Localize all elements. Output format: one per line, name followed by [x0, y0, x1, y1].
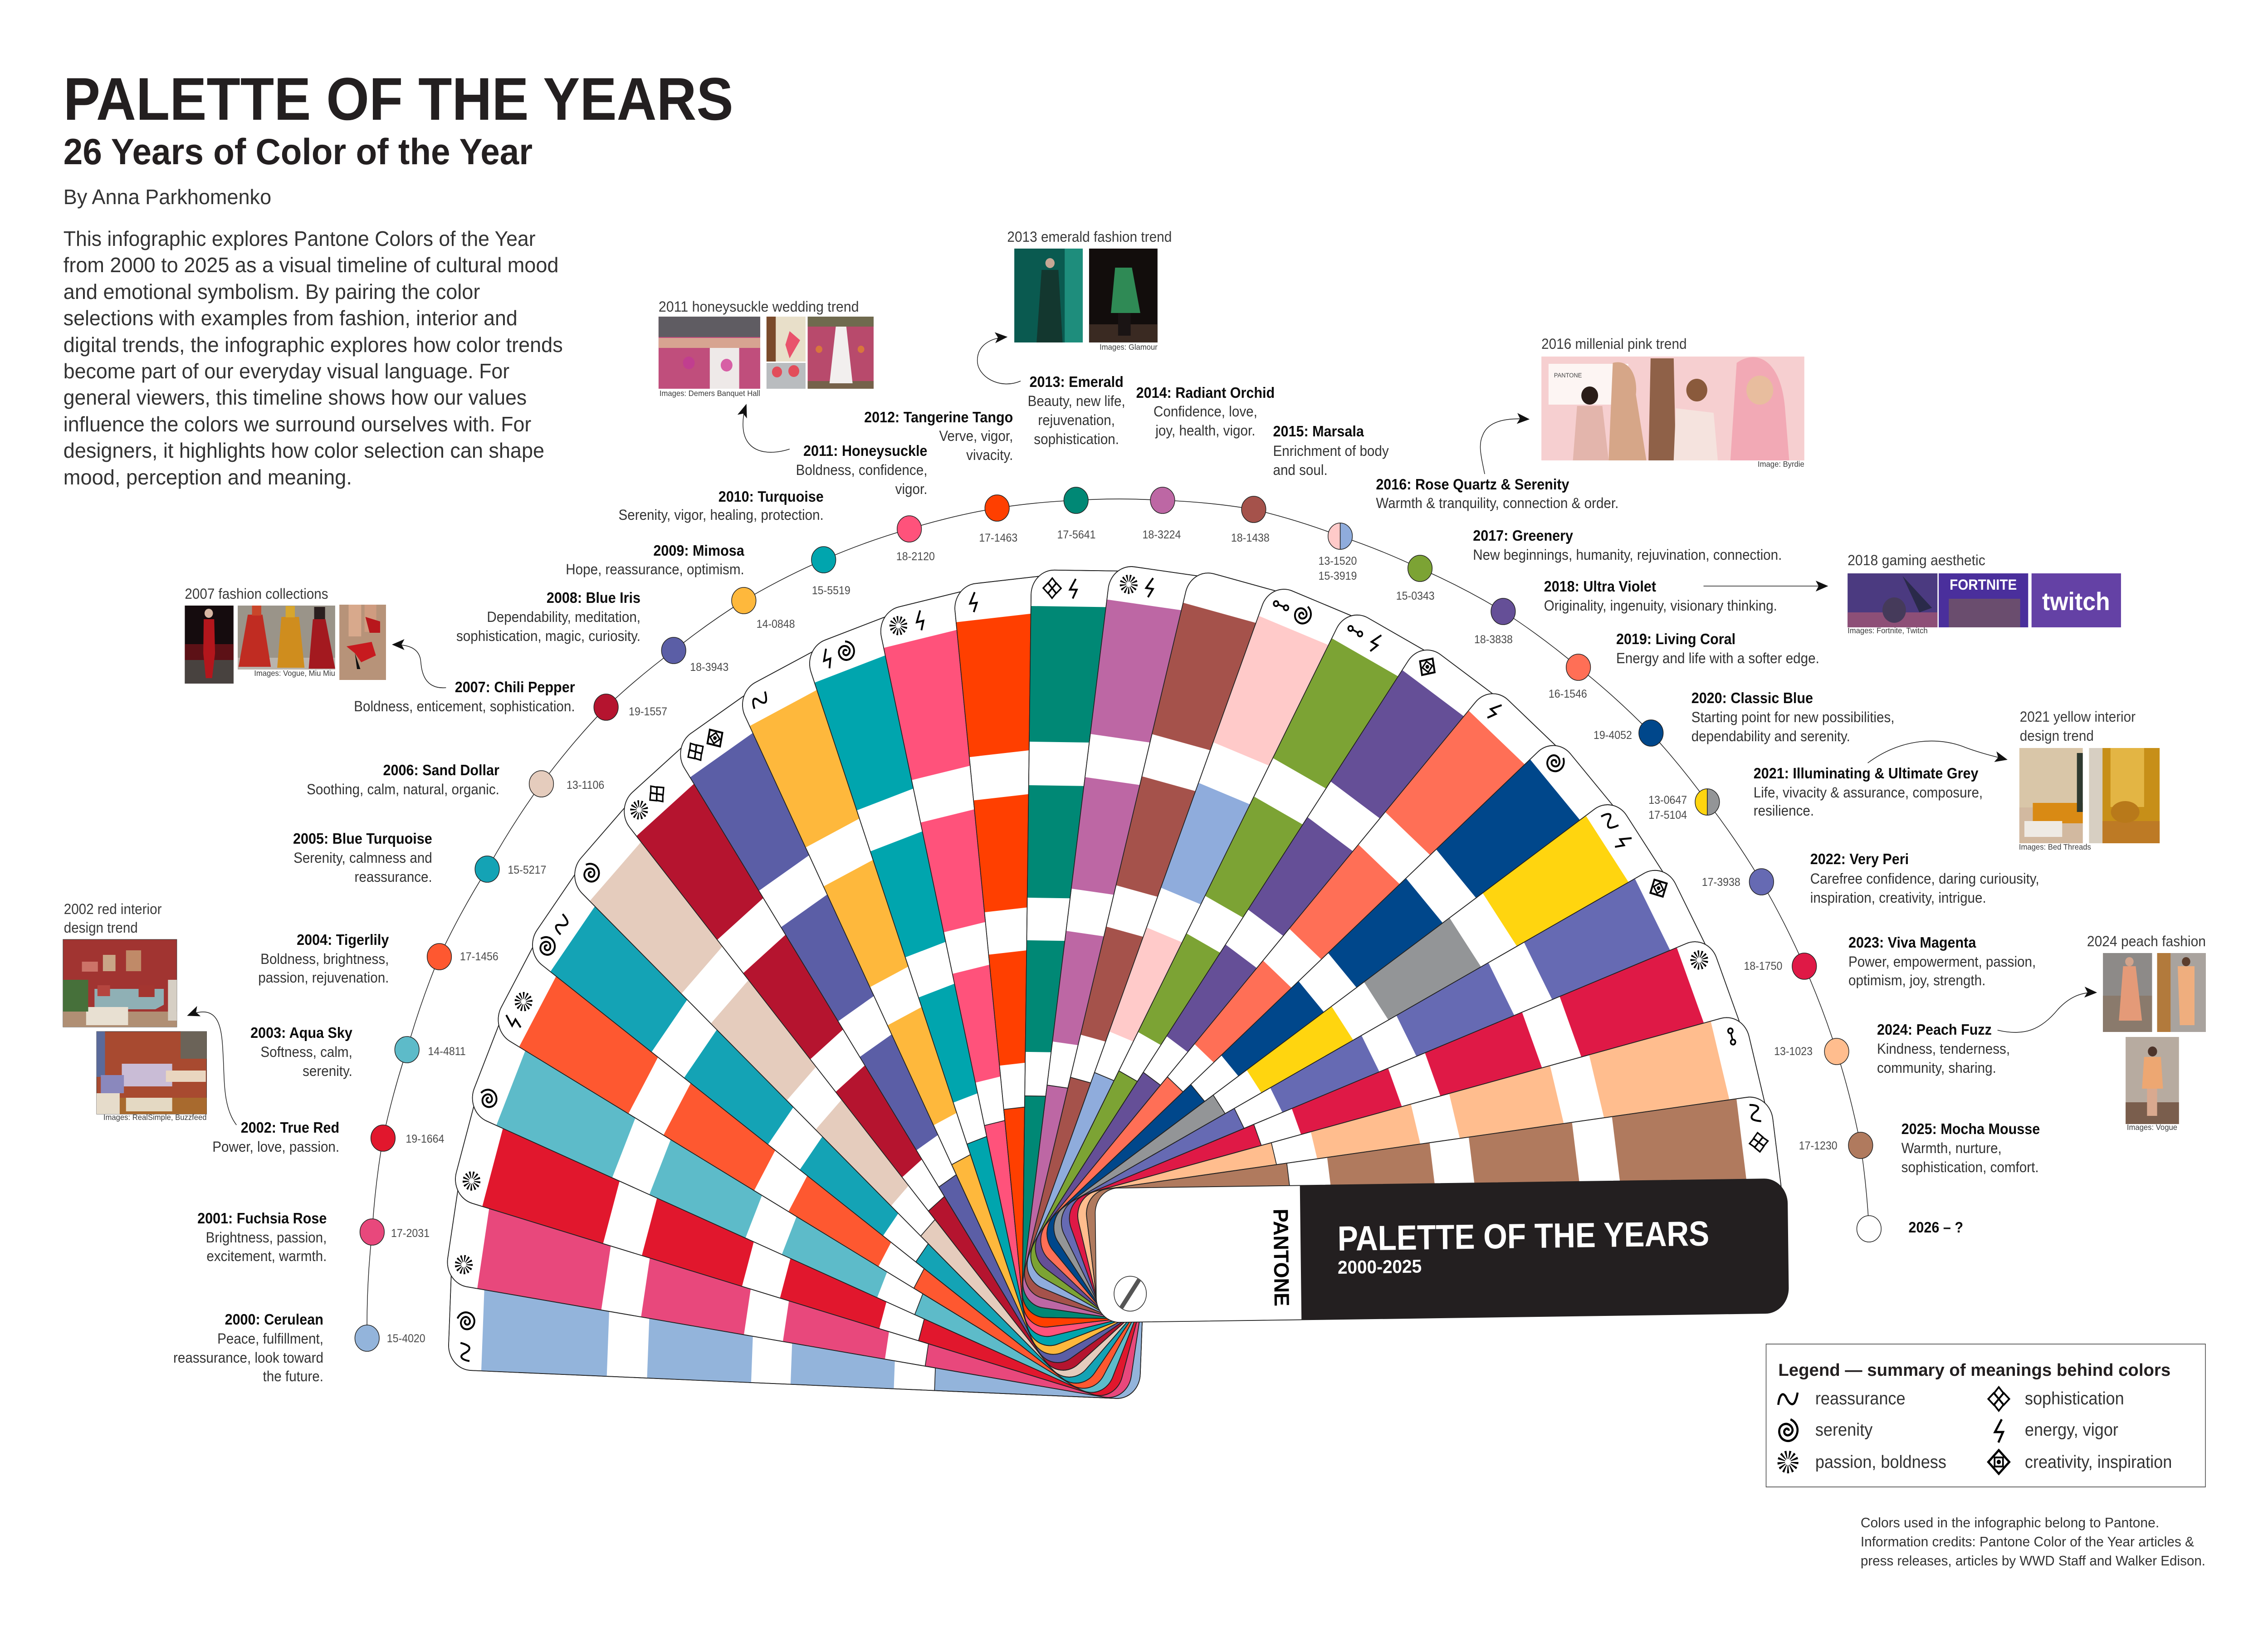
label: 2001 Fuchsia Rose: excitement, warmth.	[206, 1248, 327, 1264]
pantone codes: 17-2031	[391, 1227, 430, 1240]
pantone codes: 15-3919	[1318, 570, 1357, 582]
label: 2011 Honeysuckle: Boldness, confidence,	[796, 462, 927, 478]
label: 2022 Very Peri: inspiration, creativity, intrigue.	[1810, 890, 1986, 906]
label: 2013 Emerald: Beauty, new life,	[1028, 393, 1125, 409]
arrow: 2013 to fashion	[978, 337, 1021, 384]
pantone codes: 17-5104	[1648, 809, 1687, 821]
label: 2008 Blue Iris: 2008: Blue Iris	[547, 589, 640, 606]
legend item: reassurance: reassurance	[1815, 1389, 1906, 1408]
pantone codes: 19-1664	[406, 1133, 444, 1145]
label: 2020 Classic Blue: 2020: Classic Blue	[1691, 689, 1813, 706]
intro paragraph: designers, it highlights how color selection can shape	[64, 440, 544, 462]
photo: bride and bridesmaids	[808, 317, 874, 389]
photo: space scene	[1848, 573, 1937, 627]
label: 2024 Peach Fuzz: community, sharing.	[1877, 1060, 1996, 1076]
label: 2000 Cerulean: Peace, fulfillment,	[217, 1330, 323, 1347]
label: 2004 Tigerlily: 2004: Tigerlily	[297, 931, 389, 948]
pantone codes: 15-4020	[387, 1332, 425, 1345]
cover brand: PANTONE	[1269, 1208, 1293, 1306]
blade: 2003 Aqua Sky	[465, 988, 1152, 1400]
pivot screw	[1114, 1276, 1146, 1311]
intro paragraph: become part of our everyday visual language. For	[64, 360, 509, 383]
label: 2001 Fuchsia Rose: 2001: Fuchsia Rose	[197, 1210, 327, 1227]
label: 2022 Very Peri: Carefree confidence, daring curiousity,	[1810, 870, 2039, 887]
photo: pink collage: PANTONE	[1554, 372, 1582, 379]
label: 2014 Radiant Orchid: joy, health, vigor.	[1155, 422, 1255, 439]
label: 2022 Very Peri: 2022: Very Peri	[1810, 851, 1909, 867]
caption: design trend	[64, 919, 138, 936]
label: 2012 Tangerine Tango: vivacity.	[966, 447, 1013, 463]
photo: calla lily	[767, 317, 806, 362]
pantone codes: 13-1520	[1318, 555, 1357, 567]
intro paragraph: selections with examples from fashion, interior and	[64, 307, 518, 330]
arrow: 2002 to interiors	[189, 1012, 236, 1125]
caption: design trend	[2020, 728, 2094, 744]
caption: 2024 peach fashion	[2087, 933, 2206, 949]
photo: red gown	[185, 606, 234, 684]
blade: 2013 Emerald	[1022, 570, 1156, 1319]
label: 2017 Greenery: New beginnings, humanity, rejuvination, connection.	[1473, 547, 1782, 563]
label: 2002 True Red: 2002: True Red	[241, 1119, 339, 1136]
credit: Images: Fortnite, Twitch	[1848, 626, 1928, 635]
label: 2023 Viva Magenta: 2023: Viva Magenta	[1848, 934, 1976, 951]
legend panel	[1766, 1344, 2205, 1487]
blade: 2002 True Red	[450, 1067, 1150, 1401]
legend heading: Legend — summary of meanings behind colors	[1778, 1360, 2170, 1379]
label: 2019 Living Coral: Energy and life with a softer edge.	[1616, 650, 1819, 666]
intro paragraph: from 2000 to 2025 as a visual timeline of cultural mood	[64, 254, 558, 277]
label: 2006 Sand Dollar: Soothing, calm, natural, organic.	[307, 781, 499, 797]
label: 2005 Blue Turquoise: 2005: Blue Turquoise	[293, 830, 432, 847]
credit: Images: Demers Banquet Hall	[660, 388, 760, 398]
blade: 2000 Cerulean	[448, 1235, 1144, 1399]
label: 2009 Mimosa: 2009: Mimosa	[653, 542, 744, 559]
caption: 2011 honeysuckle wedding trend	[659, 298, 859, 315]
intro paragraph: This infographic explores Pantone Colors of the Year	[64, 228, 536, 250]
cover years: 2000-2025	[1338, 1256, 1422, 1278]
photo: yellow bedroom	[2019, 748, 2083, 843]
photo: red shoes	[339, 605, 386, 680]
blade: 2024 Peach Fuzz	[1073, 1012, 1774, 1328]
caption: 2016 millenial pink trend	[1541, 336, 1687, 352]
arrow: 2024 to peach fashion	[1998, 993, 2095, 1032]
logo: streaming platform	[2032, 573, 2121, 627]
pantone codes: 18-3943	[690, 661, 728, 674]
image group: 2021 yellow interior	[2019, 709, 2160, 851]
blade: 2015 Marsala	[1020, 567, 1312, 1325]
label: 2025 Mocha Mousse: sophistication, comfort.	[1901, 1159, 2039, 1175]
credits note: Colors used in the infographic belong to Pantone.	[1861, 1515, 2159, 1530]
pantone codes: 17-1456	[460, 950, 499, 963]
label: 2020 Classic Blue: dependability and serenity.	[1691, 728, 1850, 744]
credit: Images: Vogue	[2127, 1122, 2177, 1132]
photo: table flowers	[767, 363, 806, 389]
blade: 2014 Radiant Orchid	[1020, 563, 1235, 1322]
blade: 2008 Blue Iris	[672, 674, 1155, 1372]
pantone codes: 16-1546	[1549, 688, 1587, 700]
label: 2011 Honeysuckle: vigor.	[895, 481, 927, 497]
label: 2010 Turquoise: Serenity, vigor, healing, protection.	[618, 507, 824, 523]
photo: peach suit	[2157, 953, 2206, 1032]
pantone codes: 17-1463	[979, 532, 1017, 544]
blade: 2009 Mimosa	[735, 634, 1154, 1363]
blade: 2001 Fuchsia Rose	[444, 1150, 1147, 1401]
label: 2026: 2026 – ?	[1908, 1219, 1963, 1236]
photo: pink collage	[1541, 357, 1804, 460]
label: 2018 Ultra Violet: 2018: Ultra Violet	[1544, 578, 1656, 595]
image group: 2013 emerald fashion	[1007, 229, 1172, 352]
pantone codes: 18-3224	[1143, 528, 1181, 541]
swatch fan	[444, 563, 1789, 1401]
label: 2012 Tangerine Tango: 2012: Tangerine Tango	[864, 409, 1013, 425]
intro paragraph: influence the colors we surround ourselves with. For	[64, 413, 532, 436]
legend item: energy, vigor: energy, vigor	[2025, 1420, 2118, 1439]
photo: bridesmaids	[659, 317, 760, 389]
label: 2021 Illuminating and Ultimate Grey: 2021: Illuminating & Ultimate Grey	[1754, 765, 1979, 782]
credit: Images: Glamour	[1100, 342, 1158, 352]
credit: Images: Vogue, Miu Miu	[254, 668, 335, 678]
photo: game poster: FORTNITE	[1950, 577, 2017, 593]
blade: 2011 Honeysuckle	[876, 583, 1151, 1341]
pantone codes: 18-2120	[896, 550, 935, 563]
label: 2021 Illuminating and Ultimate Grey: Life, vivacity & assurance, composure,	[1754, 784, 1983, 801]
blade: 2010 Turquoise	[803, 603, 1153, 1353]
legend item: creativity, inspiration: creativity, inspiration	[2025, 1452, 2172, 1472]
label: 2020 Classic Blue: Starting point for new possibilities,	[1691, 709, 1895, 725]
label: 2018 Ultra Violet: Originality, ingenuity, visionary thinking.	[1544, 597, 1777, 614]
blade: 2007 Chili Pepper	[615, 722, 1155, 1380]
pantone codes: 17-1230	[1799, 1139, 1838, 1152]
label: 2000 Cerulean: 2000: Cerulean	[225, 1311, 323, 1328]
pantone codes: 14-0848	[757, 618, 795, 631]
cover title: PALETTE OF THE YEARS	[1337, 1214, 1710, 1258]
label: 2015 Marsala: Enrichment of body	[1273, 443, 1389, 459]
photo: orange bedroom	[97, 1032, 207, 1114]
pantone codes: 13-0647	[1648, 794, 1687, 807]
image group: 2007 fashion collections	[185, 586, 386, 684]
blade: 2005 Blue Turquoise	[523, 842, 1154, 1393]
blade: 2020 Classic Blue	[1037, 735, 1637, 1332]
fan cover	[1095, 1178, 1789, 1323]
label: 2006 Sand Dollar: 2006: Sand Dollar	[383, 762, 499, 778]
credit: Images: Bed Threads	[2019, 842, 2091, 851]
pantone codes: 15-5217	[508, 864, 546, 876]
label: 2019 Living Coral: 2019: Living Coral	[1616, 631, 1735, 647]
label: 2003 Aqua Sky: Softness, calm,	[260, 1044, 352, 1060]
blade: 2025 Mocha Mousse	[1084, 1094, 1786, 1325]
label: 2016 Rose Quartz and Serenity: 2016: Rose Quartz & Serenity	[1376, 476, 1569, 493]
pantone codes: 13-1106	[567, 779, 604, 792]
photo: peach coat runway	[2103, 953, 2152, 1032]
photo: green plaid coat	[1089, 249, 1158, 342]
caption: 2021 yellow interior	[2020, 709, 2136, 725]
label: 2013 Emerald: sophistication.	[1034, 431, 1119, 447]
credit: Images: RealSimple, Buzzfeed	[103, 1112, 207, 1122]
label: 2005 Blue Turquoise: Serenity, calmness and	[293, 850, 432, 866]
label: 2005 Blue Turquoise: reassurance.	[355, 869, 432, 885]
photo: mustard room	[2089, 748, 2160, 843]
blade: 2006 Sand Dollar	[565, 778, 1155, 1388]
legend item: creativity, inspiration	[1988, 1450, 2172, 1474]
photo: peach skirt suit	[2126, 1037, 2179, 1124]
subtitle: 26 Years of Color of the Year	[64, 131, 533, 172]
byline: By Anna Parkhomenko	[64, 186, 271, 209]
blade: 2004 Tigerlily	[490, 912, 1154, 1397]
arrow: 2021 to interiors	[1868, 741, 2006, 763]
label: 2011 Honeysuckle: 2011: Honeysuckle	[803, 442, 927, 459]
pantone codes	[387, 528, 1838, 1345]
label: 2015 Marsala: 2015: Marsala	[1273, 423, 1364, 440]
label: 2013 Emerald: rejuvenation,	[1038, 412, 1115, 428]
image group: 2011 honeysuckle wedding	[659, 298, 874, 398]
blade: 2022 Very Peri	[1053, 861, 1723, 1331]
label: 2004 Tigerlily: Boldness, brightness,	[260, 951, 389, 967]
pantone codes: 13-1023	[1774, 1045, 1813, 1058]
label: 2003 Aqua Sky: serenity.	[303, 1063, 352, 1079]
label: 2021 Illuminating and Ultimate Grey: resilience.	[1754, 802, 1814, 819]
pantone codes: 19-1557	[629, 705, 667, 718]
legend item: energy, vigor	[1995, 1419, 2118, 1442]
label: 2014 Radiant Orchid: Confidence, love,	[1154, 403, 1257, 420]
label: 2003 Aqua Sky: 2003: Aqua Sky	[250, 1024, 352, 1041]
intro paragraph: mood, perception and meaning.	[64, 466, 352, 489]
blade: 2012 Tangerine Tango	[953, 572, 1149, 1330]
caption: 2013 emerald fashion trend	[1007, 229, 1172, 245]
logo: streaming platform: twitch	[2042, 587, 2110, 616]
label: 2023 Viva Magenta: optimism, joy, strength.	[1848, 972, 1985, 988]
photo: red living room	[63, 939, 177, 1027]
caption: 2018 gaming aesthetic	[1848, 552, 1985, 568]
blade: 2017 Greenery	[1023, 606, 1457, 1329]
pantone codes: 18-1438	[1231, 532, 1270, 544]
label: 2025 Mocha Mousse: 2025: Mocha Mousse	[1901, 1120, 2040, 1137]
photo: game poster	[1939, 573, 2028, 627]
label: 2017 Greenery: 2017: Greenery	[1473, 527, 1573, 544]
legend item: serenity	[1779, 1419, 1872, 1441]
label: 2024 Peach Fuzz: Kindness, tenderness,	[1877, 1041, 2010, 1057]
legend item: sophistication: sophistication	[2025, 1389, 2124, 1408]
timeline line	[367, 499, 1869, 1338]
intro paragraph: and emotional symbolism. By pairing the color	[64, 281, 480, 303]
cover shape	[1095, 1178, 1789, 1323]
pantone codes: 15-5519	[812, 584, 850, 597]
caption: 2007 fashion collections	[185, 586, 328, 602]
credits note: Information credits: Pantone Color of the Year articles &	[1861, 1534, 2194, 1550]
caption: 2002 red interior	[64, 901, 161, 917]
blade: 2023 Viva Magenta	[1063, 934, 1753, 1330]
pantone codes: 17-5641	[1057, 528, 1095, 541]
label: 2012 Tangerine Tango: Verve, vigor,	[939, 428, 1013, 444]
intro paragraph: digital trends, the infographic explores how color trends	[64, 334, 563, 357]
label: 2002 True Red: Power, love, passion.	[212, 1139, 339, 1155]
title: PALETTE OF THE YEARS	[64, 66, 733, 133]
image group: 2002 red interior design	[63, 901, 207, 1122]
arrow: 2018 to gaming	[1704, 586, 1827, 587]
label: 2008 Blue Iris: sophistication, magic, curiosity.	[456, 628, 640, 644]
label: 2015 Marsala: and soul.	[1273, 462, 1328, 478]
label: 2014 Radiant Orchid: 2014: Radiant Orchid	[1136, 384, 1275, 401]
pantone codes: 14-4811	[428, 1045, 466, 1058]
label: 2024 Peach Fuzz: 2024: Peach Fuzz	[1877, 1021, 1992, 1038]
photo: runway dresses	[238, 606, 335, 670]
label: 2016 Rose Quartz and Serenity: Warmth & tranquility, connection & order.	[1376, 495, 1618, 511]
label: 2025 Mocha Mousse: Warmth, nurture,	[1901, 1140, 2002, 1156]
legend item: passion, boldness: passion, boldness	[1815, 1452, 1946, 1472]
label: 2009 Mimosa: Hope, reassurance, optimism.	[566, 561, 744, 577]
label: 2004 Tigerlily: passion, rejuvenation.	[258, 969, 389, 986]
label: 2000 Cerulean: reassurance, look toward	[173, 1349, 323, 1366]
label: 2023 Viva Magenta: Power, empowerment, passion,	[1848, 953, 2036, 970]
label: 2007 Chili Pepper: Boldness, enticement, sophistication.	[354, 698, 575, 714]
blade: 2018 Ultra Violet	[1026, 640, 1524, 1331]
pantone codes: 19-4052	[1593, 729, 1632, 742]
label: 2010 Turquoise: 2010: Turquoise	[719, 488, 824, 505]
legend item: serenity: serenity	[1815, 1420, 1872, 1439]
blade: 2019 Living Coral	[1031, 684, 1584, 1331]
arrow: 2016 to pink trend	[1480, 419, 1528, 474]
photo: emerald gown	[1014, 249, 1083, 342]
arrow: 2007 to fashion	[394, 645, 446, 688]
arrow: 2011 to wedding	[743, 406, 790, 452]
label: 2001 Fuchsia Rose: Brightness, passion,	[206, 1229, 327, 1246]
credits note: press releases, articles by WWD Staff and Walker Edison.	[1861, 1553, 2205, 1569]
label: 2000 Cerulean: the future.	[263, 1368, 323, 1384]
legend box	[1766, 1344, 2205, 1487]
image group: 2024 peach fashion	[2087, 933, 2206, 1132]
label: 2008 Blue Iris: Dependability, meditation,	[487, 609, 640, 625]
pantone codes: 18-3838	[1474, 633, 1513, 646]
pantone codes: 18-1750	[1744, 960, 1782, 973]
label: 2013 Emerald: 2013: Emerald	[1030, 373, 1124, 390]
timeline dots	[355, 487, 1881, 1351]
timeline	[355, 487, 1881, 1351]
image group: 2016 millennial pink	[1541, 336, 1804, 469]
credit: Image: Byrdie	[1758, 459, 1804, 469]
pantone codes: 17-3938	[1702, 876, 1740, 889]
blade: 2016 Rose Quartz and Serenity	[1020, 582, 1387, 1327]
legend item: sophistication	[1988, 1387, 2124, 1411]
pantone codes: 15-0343	[1396, 590, 1435, 602]
blade: 2021 Illuminating and Ultimate Grey	[1045, 795, 1684, 1332]
image group: 2018 gaming aesthetic	[1848, 552, 2121, 635]
intro paragraph: general viewers, this timeline shows how our values	[64, 386, 527, 409]
label: 2007 Chili Pepper: 2007: Chili Pepper	[455, 679, 575, 695]
